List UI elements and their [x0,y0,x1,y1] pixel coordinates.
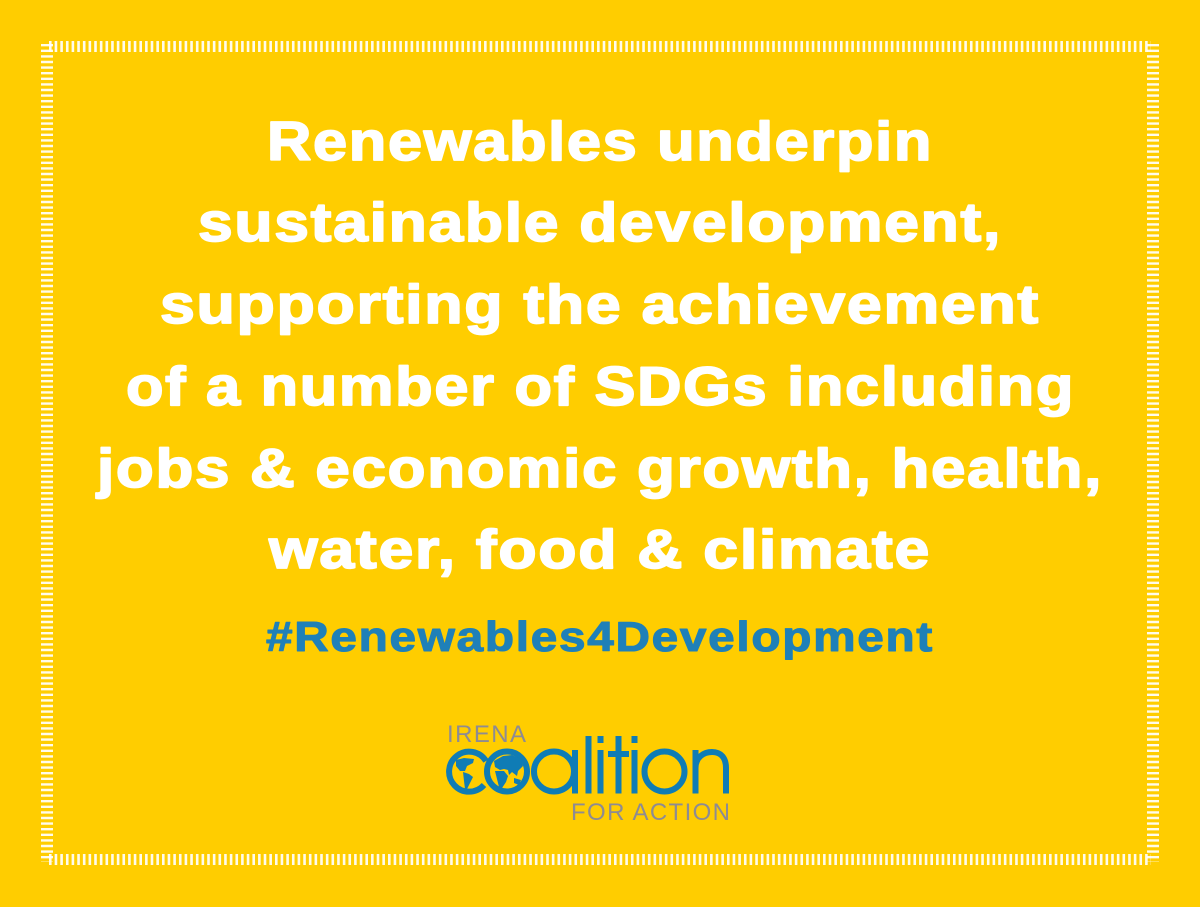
headline line 3: supporting the achievement [160,273,1040,335]
hashtag: #Renewables4Development [266,613,934,660]
letter i [598,736,604,794]
logo text: IRENA: IRENA [447,721,526,748]
headline line 5: jobs & economic growth, health, [96,437,1103,499]
logo wordmark: coalition [449,736,726,794]
headline line 1: Renewables underpin [267,110,933,172]
headline line 2: sustainable development, [198,191,1002,253]
letter l [586,736,592,794]
logo: IRENA Coalition for Action [447,721,730,826]
letter n [696,750,726,794]
letter a [534,752,574,792]
globe letter o [487,752,527,792]
logo text: FOR ACTION: FOR ACTION [571,799,730,826]
globe letter c [449,752,486,792]
letter o second [644,752,684,792]
letter t [608,736,629,794]
headline line 4: of a number of SDGs including [126,355,1075,417]
headline line 6: water, food & climate [268,518,931,580]
continents: Eurasia and Africa [494,755,523,788]
continents: Americas [456,758,474,789]
headline [96,110,1103,580]
letter i second [632,736,638,794]
